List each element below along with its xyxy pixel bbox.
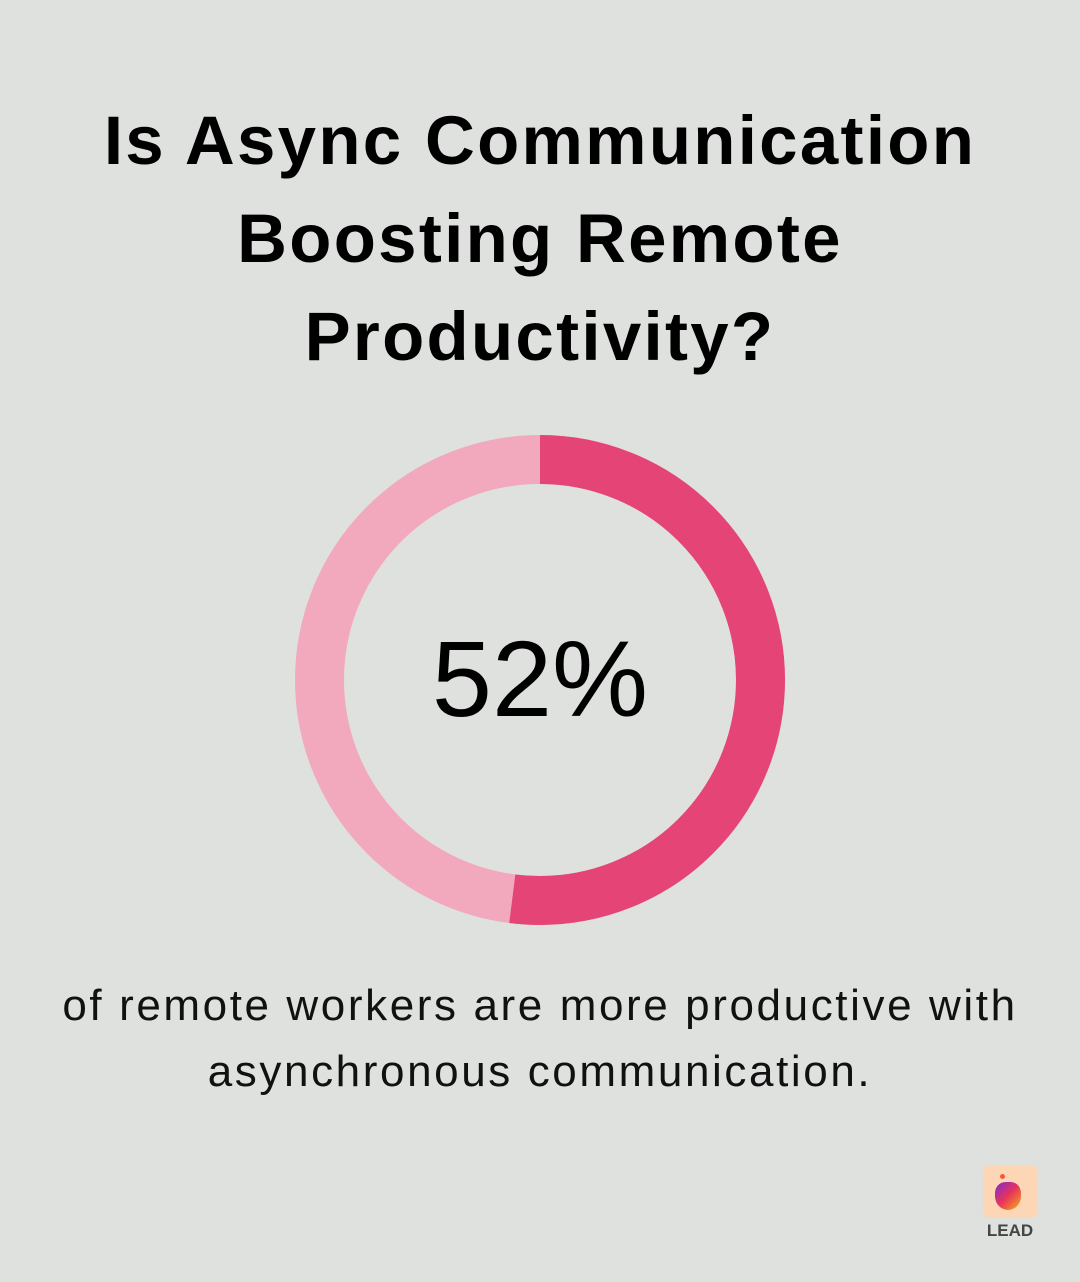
- logo: LEAD: [987, 1221, 1033, 1240]
- logo: [983, 1165, 1037, 1240]
- title: [104, 102, 976, 375]
- title: Is Async Communication: [104, 102, 976, 179]
- title: Productivity?: [305, 298, 775, 375]
- caption: [62, 981, 1018, 1096]
- title: Boosting Remote: [237, 200, 843, 277]
- donut chart: 52%: [432, 618, 648, 739]
- caption: of remote workers are more productive with: [62, 981, 1018, 1030]
- caption: asynchronous communication.: [208, 1047, 872, 1096]
